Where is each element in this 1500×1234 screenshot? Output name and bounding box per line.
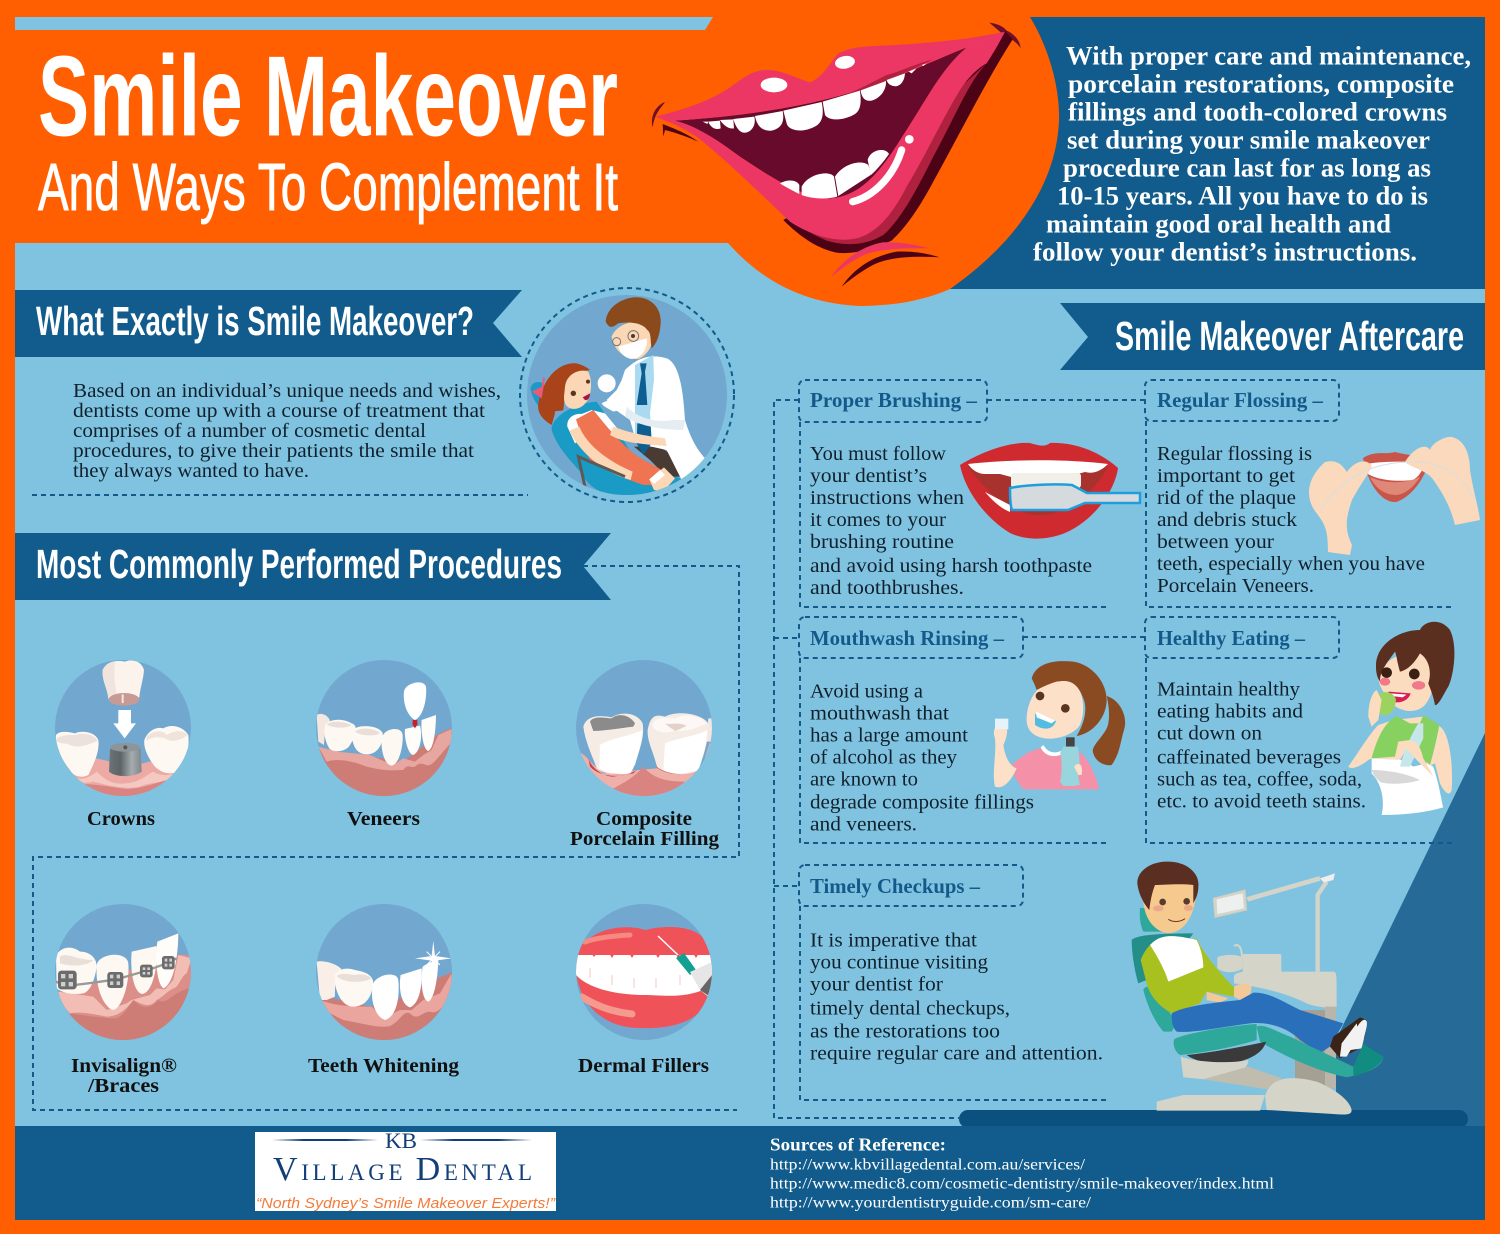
heading: Most Commonly Performed Procedures [15,533,611,600]
heading: Regular Flossing: Regular Flossing – [1157,388,1323,412]
label: Crowns: Crowns [87,808,155,830]
label: Composite Porcelain Filling: Porcelain Filling [570,828,719,850]
heading: What Exactly is Smile Makeover [15,290,522,357]
intro text block: set during your smile makeover [1067,126,1430,155]
connector lines [774,400,1453,1118]
floor bar [959,1110,1468,1128]
text: Proper Brushing: your dentist’s [810,466,927,487]
intro text block: maintain good oral health and [1046,210,1392,239]
text: Timely Checkups: your dentist for [810,975,944,996]
text: Healthy Eating: Maintain healthy [1157,680,1300,701]
text: Timely Checkups: as the restorations too [810,1022,1000,1043]
icon: woman eating an apple [1348,622,1454,815]
text: Regular Flossing: Regular flossing is [1157,444,1312,465]
card: Timely Checkups [799,865,1103,1065]
sources of reference [770,1135,1274,1212]
icon: girl rinsing with mouthwash [994,661,1125,789]
sources of reference: http://www.yourdentistryguide.com/sm-care/ [770,1195,1092,1212]
top navy panel [950,17,1485,289]
logo: KB Village Dental: KB [385,1128,417,1153]
text: Regular Flossing: between your [1157,532,1275,553]
definition text: Based on an individual’s unique needs and wishes, [73,381,501,402]
label: Composite Porcelain Filling [570,808,719,850]
title line 1: Smile Makeover [38,34,618,160]
text: Timely Checkups [810,931,1103,1065]
procedure: Invisalign / Braces [55,904,192,1097]
definition text: dentists come up with a course of treatment that [73,401,486,422]
intro text block: follow your dentist’s instructions. [1033,238,1417,267]
label: Veneers: Veneers [347,808,420,830]
definition text [73,381,501,482]
logo: KB Village Dental [255,1128,556,1212]
definition text: comprises of a number of cosmetic dental [73,421,427,442]
sources of reference: Sources of Reference: [770,1135,946,1155]
right diagonal panel [1336,733,1485,1126]
sources of reference: http://www.kbvillagedental.com.au/services/ [770,1157,1086,1174]
card: Healthy Eating [1145,617,1454,815]
heading: Healthy Eating: Healthy Eating – [1157,626,1305,650]
text: Regular Flossing: important to get [1157,466,1296,487]
text: Proper Brushing: You must follow [810,444,946,465]
text: Timely Checkups: require regular care and attention. [810,1044,1103,1065]
icon: hands flossing teeth [1309,437,1480,555]
text: Mouthwash Rinsing: mouthwash that [810,704,950,725]
logo: KB Village Dental: “North Sydney’s Smile Makeover Experts!” [256,1195,556,1212]
heading: What Exactly is Smile Makeover: What Exactly is Smile Makeover? [36,298,474,344]
intro text block: fillings and tooth-colored crowns [1068,98,1447,127]
icon: dentist with child patient [520,288,734,502]
intro text block: 10-15 years. All you have to do is [1057,182,1428,211]
procedure: Veneers [316,660,453,830]
footer band [15,1126,1485,1220]
heading: Most Commonly Performed Procedures: Most Commonly Performed Procedures [36,541,562,587]
procedure: Composite Porcelain Filling [570,660,719,850]
text: Healthy Eating: etc. to avoid teeth stains. [1157,792,1366,813]
text: Proper Brushing [810,444,1092,599]
icon: lips with toothbrush [960,443,1140,539]
label: Composite Porcelain Filling: Composite [596,808,692,830]
text: Regular Flossing [1157,444,1425,597]
text: Healthy Eating [1157,680,1366,813]
text: Healthy Eating: such as tea, coffee, soda, [1157,770,1362,791]
text: Regular Flossing: rid of the plaque [1157,488,1296,509]
procedure: Dermal Fillers [576,904,712,1077]
text: Proper Brushing: and toothbrushes. [810,578,964,599]
sources of reference: http://www.medic8.com/cosmetic-dentistry/smile-makeover/index.html [770,1176,1274,1193]
text: Mouthwash Rinsing: has a large amount [810,726,969,747]
intro text block: With proper care and maintenance, [1066,42,1471,71]
heading: Timely Checkups: Timely Checkups – [810,874,980,898]
text: Timely Checkups: It is imperative that [810,931,978,952]
text: Mouthwash Rinsing: degrade composite fillings [810,793,1034,814]
text: Healthy Eating: cut down on [1157,724,1262,745]
icon: patient in dental chair [1132,862,1383,1114]
label: Invisalign / Braces: /Braces [87,1075,159,1097]
card: Proper Brushing [799,380,1140,599]
card: Mouthwash Rinsing [799,617,1125,836]
intro text block [1033,42,1471,267]
label: Teeth Whitening: Teeth Whitening [308,1055,459,1077]
text: Mouthwash Rinsing: are known to [810,770,918,791]
text: Mouthwash Rinsing [810,682,1034,836]
text: Proper Brushing: and avoid using harsh toothpaste [810,556,1092,577]
procedure: Teeth Whitening [308,904,459,1077]
title line 2: And Ways To Complement It [38,150,618,225]
intro text block: porcelain restorations, composite [1068,70,1454,99]
text: Healthy Eating: eating habits and [1157,702,1303,723]
text: Mouthwash Rinsing: and veneers. [810,815,917,836]
label: Invisalign / Braces: Invisalign® [71,1055,177,1077]
text: Timely Checkups: you continue visiting [810,953,988,974]
orange curved backdrop behind lips [700,17,1059,306]
text: Mouthwash Rinsing: of alcohol as they [810,748,957,769]
text: Proper Brushing: brushing routine [810,532,954,553]
text: Proper Brushing: it comes to your [810,510,947,531]
title banner [15,17,1059,306]
heading: Mouthwash Rinsing: Mouthwash Rinsing – [810,626,1004,650]
label: Invisalign / Braces [71,1055,177,1097]
procedure: Crowns [53,660,193,830]
text: Mouthwash Rinsing: Avoid using a [810,682,923,703]
text: Proper Brushing: instructions when [810,488,964,509]
logo: KB Village Dental: VILLAGE DENTAL [273,1151,532,1188]
label: Dermal Fillers: Dermal Fillers [578,1055,709,1077]
definition text: procedures, to give their patients the smile that [73,441,475,462]
text: Healthy Eating: caffeinated beverages [1157,748,1341,769]
heading: Smile Makeover Aftercare [1060,303,1485,370]
text: Timely Checkups: timely dental checkups, [810,999,1010,1020]
text: Regular Flossing: Porcelain Veneers. [1157,576,1314,597]
heading: Proper Brushing: Proper Brushing – [810,388,977,412]
definition text: they always wanted to have. [73,461,309,482]
icon: smiling lips [652,23,1021,287]
intro text block: procedure can last for as long as [1063,154,1431,183]
text: Regular Flossing: and debris stuck [1157,510,1297,531]
card: Regular Flossing [1145,380,1480,597]
top stripe [15,17,713,30]
text: Regular Flossing: teeth, especially when you have [1157,554,1425,575]
